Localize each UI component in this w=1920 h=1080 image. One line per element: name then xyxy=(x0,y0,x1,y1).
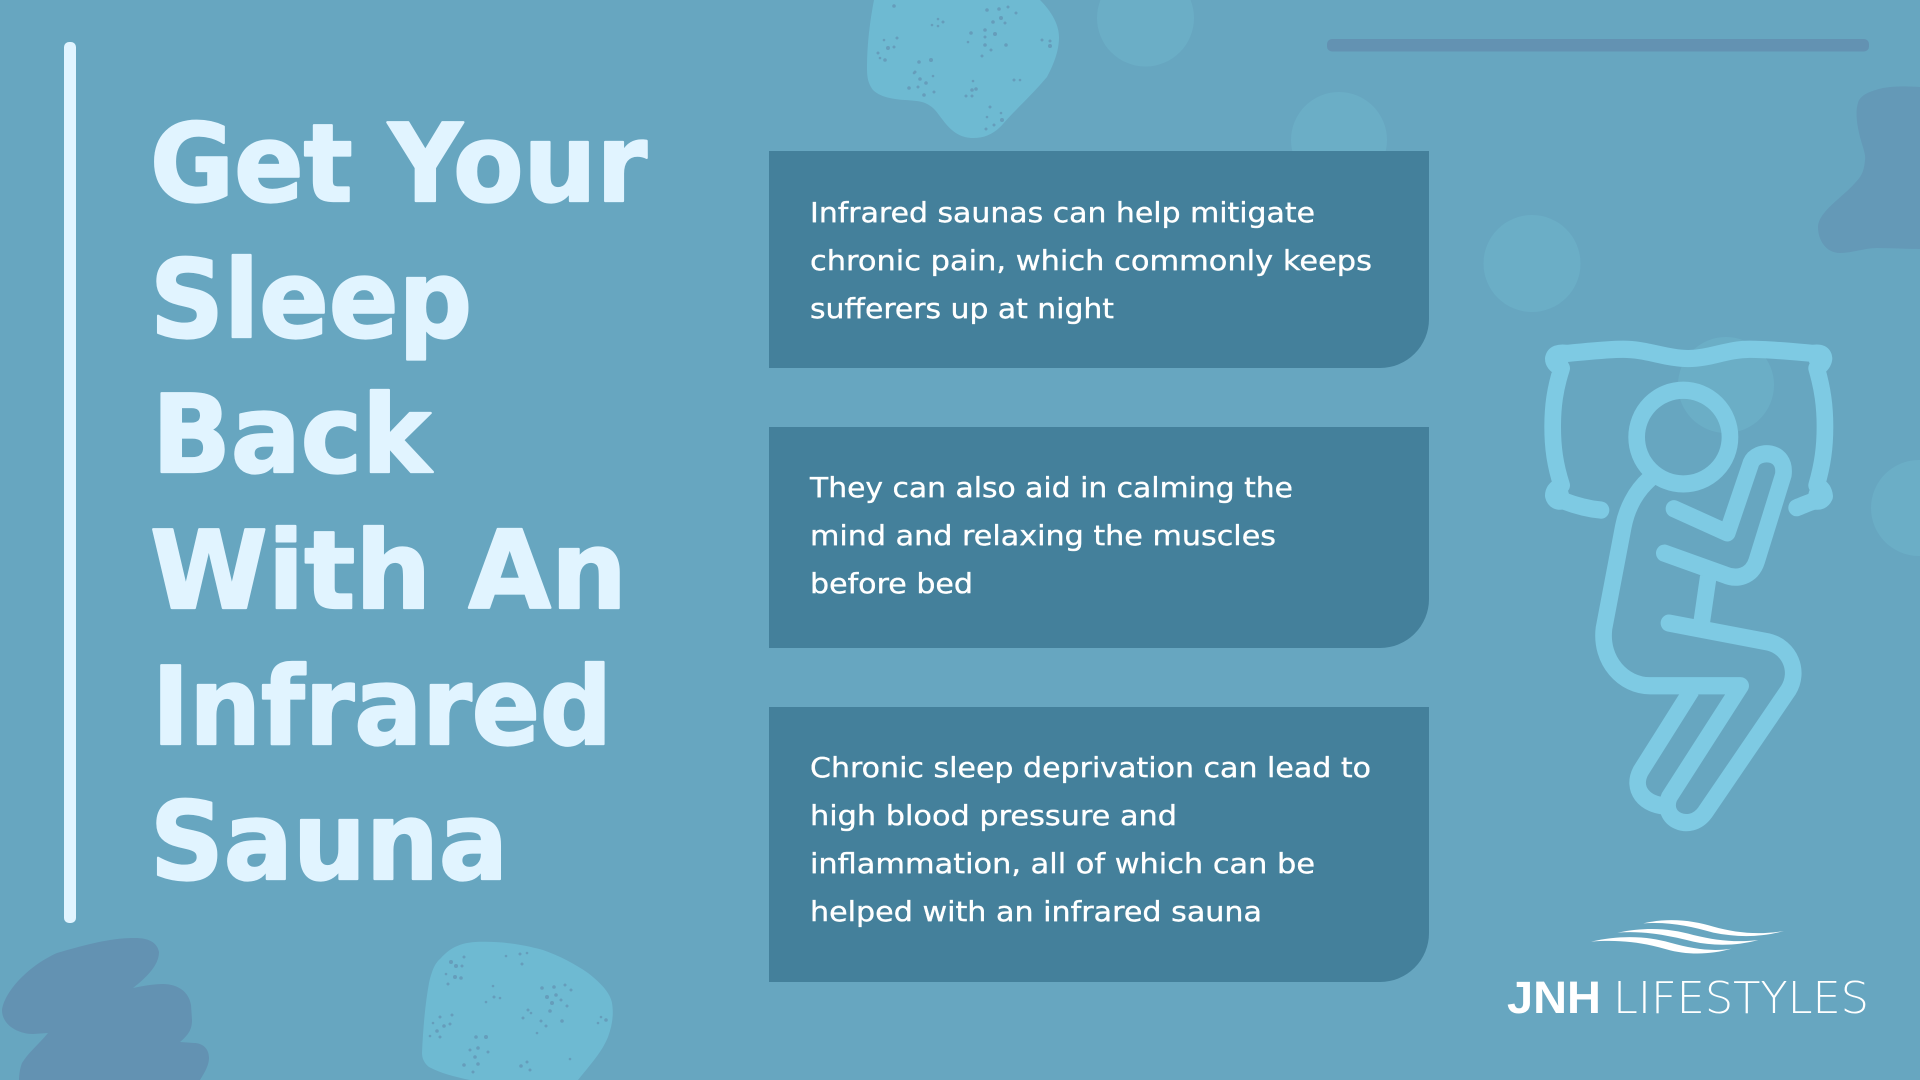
icon: person sleeping on pillow xyxy=(1546,346,1832,823)
title xyxy=(150,102,647,905)
icon: head xyxy=(1637,390,1730,484)
logo waves xyxy=(1591,920,1784,953)
title: With An xyxy=(150,509,627,634)
icon: arm xyxy=(1664,454,1784,577)
panel text: calming the mind: before bed xyxy=(810,567,973,600)
panel text: chronic pain: sufferers up at night xyxy=(810,292,1114,325)
panel text: sleep deprivation: inflammation, all of which can be xyxy=(810,847,1315,880)
panel text: calming the mind: They can also aid in calming the xyxy=(809,471,1293,504)
title: Infrared xyxy=(152,645,612,770)
panel text: calming the mind: mind and relaxing the muscles xyxy=(810,519,1276,552)
logo wordmark light: LIFESTYLES xyxy=(1613,973,1869,1024)
icon: torso line xyxy=(1701,577,1708,625)
panel text: chronic pain: Infrared saunas can help mitigate xyxy=(810,196,1315,229)
icon: pillow xyxy=(1553,349,1825,510)
panel text: sleep deprivation: high blood pressure and xyxy=(810,799,1177,832)
panel text: sleep deprivation: Chronic sleep deprivation can lead to xyxy=(810,751,1371,784)
logo wordmark bold: JNH xyxy=(1507,972,1601,1023)
panel text: chronic pain xyxy=(810,196,1372,325)
title: Sleep xyxy=(150,238,472,363)
icon: pillow corners xyxy=(1546,346,1832,508)
blob: top right dark xyxy=(1818,86,1920,253)
blob: bottom speckled xyxy=(422,942,613,1080)
top accent bar xyxy=(1327,39,1869,52)
panel: chronic pain xyxy=(769,151,1429,368)
panel text: sleep deprivation: helped with an infrared sauna xyxy=(810,895,1262,928)
icon: body and top leg xyxy=(1604,479,1793,823)
title: Back xyxy=(152,373,433,498)
logo: JNH Lifestyles xyxy=(1507,920,1869,1024)
panel: sleep deprivation xyxy=(769,707,1429,982)
panel: calming the mind xyxy=(769,427,1429,648)
blob: top speckled xyxy=(867,0,1059,138)
panel text: chronic pain: chronic pain, which commonly keeps xyxy=(810,244,1372,277)
panel text: sleep deprivation xyxy=(810,751,1371,928)
left accent bar xyxy=(64,42,76,923)
decorative circles xyxy=(1097,0,1920,556)
title: Get Your xyxy=(150,102,647,227)
title: Sauna xyxy=(150,780,508,905)
icon: lower leg xyxy=(1638,690,1692,806)
panel text: calming the mind xyxy=(809,471,1293,600)
blob: bottom left dark xyxy=(2,938,209,1080)
